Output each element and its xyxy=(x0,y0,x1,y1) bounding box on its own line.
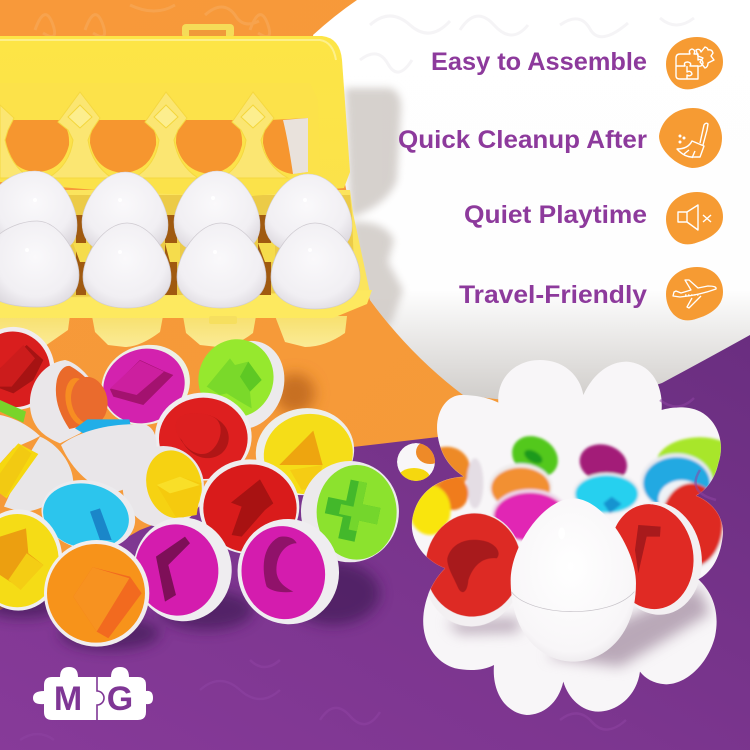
label: Quiet Playtime xyxy=(464,201,647,229)
label: Quick Cleanup After xyxy=(398,126,647,154)
halves: yellow with white shell xyxy=(123,444,209,527)
background: purple wave xyxy=(0,328,750,750)
pile shadow on orange xyxy=(275,373,315,413)
halves: white dome xyxy=(61,424,157,492)
halves: red flower xyxy=(155,393,252,481)
pile shadows xyxy=(0,562,380,650)
inset: white egg xyxy=(511,498,636,662)
halves: red arrow xyxy=(199,459,299,554)
lid window 4 white gap xyxy=(283,118,308,174)
egg highlights xyxy=(25,196,312,254)
carton shadow xyxy=(345,88,403,335)
halves: magenta L xyxy=(127,511,238,628)
halves: green cross xyxy=(301,461,399,562)
lid window 4 xyxy=(263,118,308,174)
inset: red disc right xyxy=(615,502,702,615)
background: faint white squiggles xyxy=(360,16,694,72)
logo: MG puzzle xyxy=(33,667,153,720)
carton cups xyxy=(0,315,347,347)
icon: puzzle xyxy=(666,37,723,89)
icon: muted speaker xyxy=(666,192,723,244)
inset: table shadow xyxy=(447,587,710,667)
halves: orange pentagon xyxy=(44,540,149,647)
background: faint orange squiggles xyxy=(35,5,270,37)
front row eggs xyxy=(0,221,360,309)
background: faint purple squiggles xyxy=(20,398,716,740)
loose egg halves pile xyxy=(0,316,399,650)
cloud base xyxy=(412,360,723,715)
small round inset xyxy=(397,443,435,481)
feature list xyxy=(398,37,723,320)
feature: Easy to Assemble xyxy=(431,37,723,89)
carton lid xyxy=(0,24,350,197)
label: Travel-Friendly xyxy=(459,281,647,309)
logo letters: M xyxy=(54,680,82,718)
halves: green zigzag xyxy=(187,329,296,440)
halves: yellow triangle xyxy=(249,400,361,503)
halves: yellow star xyxy=(0,509,62,611)
halves: white left dome xyxy=(0,415,40,463)
icon: airplane xyxy=(666,267,723,320)
inset cloud photo xyxy=(412,360,723,715)
lid window 3 xyxy=(176,120,242,174)
carton tray xyxy=(0,190,372,324)
halves: magenta C xyxy=(229,511,347,632)
feature: Travel-Friendly xyxy=(459,267,723,320)
inset: blurred eggs behind xyxy=(412,434,723,567)
halves: white shell with orange plug xyxy=(30,360,112,443)
inset: red disc left xyxy=(426,513,519,627)
back row eggs xyxy=(0,171,352,250)
label: Easy to Assemble xyxy=(431,48,647,76)
halves: green stub xyxy=(0,400,26,423)
feature: Quiet Playtime xyxy=(464,192,723,244)
halves: yellow half left xyxy=(0,437,73,512)
feature: Quick Cleanup After xyxy=(398,108,722,168)
egg carton xyxy=(0,24,372,347)
lid diamond posts xyxy=(0,92,288,178)
background: white blob xyxy=(313,0,750,403)
icon: broom xyxy=(659,108,722,168)
halves: blue xyxy=(35,472,142,558)
halves: red shape top left xyxy=(0,316,66,421)
lid window 2 xyxy=(90,120,156,173)
halves: magenta rhombus xyxy=(89,332,202,438)
lid window 1 xyxy=(3,120,69,172)
halves: blue stub xyxy=(75,419,131,433)
logo: MG puzzle: G xyxy=(107,680,133,718)
